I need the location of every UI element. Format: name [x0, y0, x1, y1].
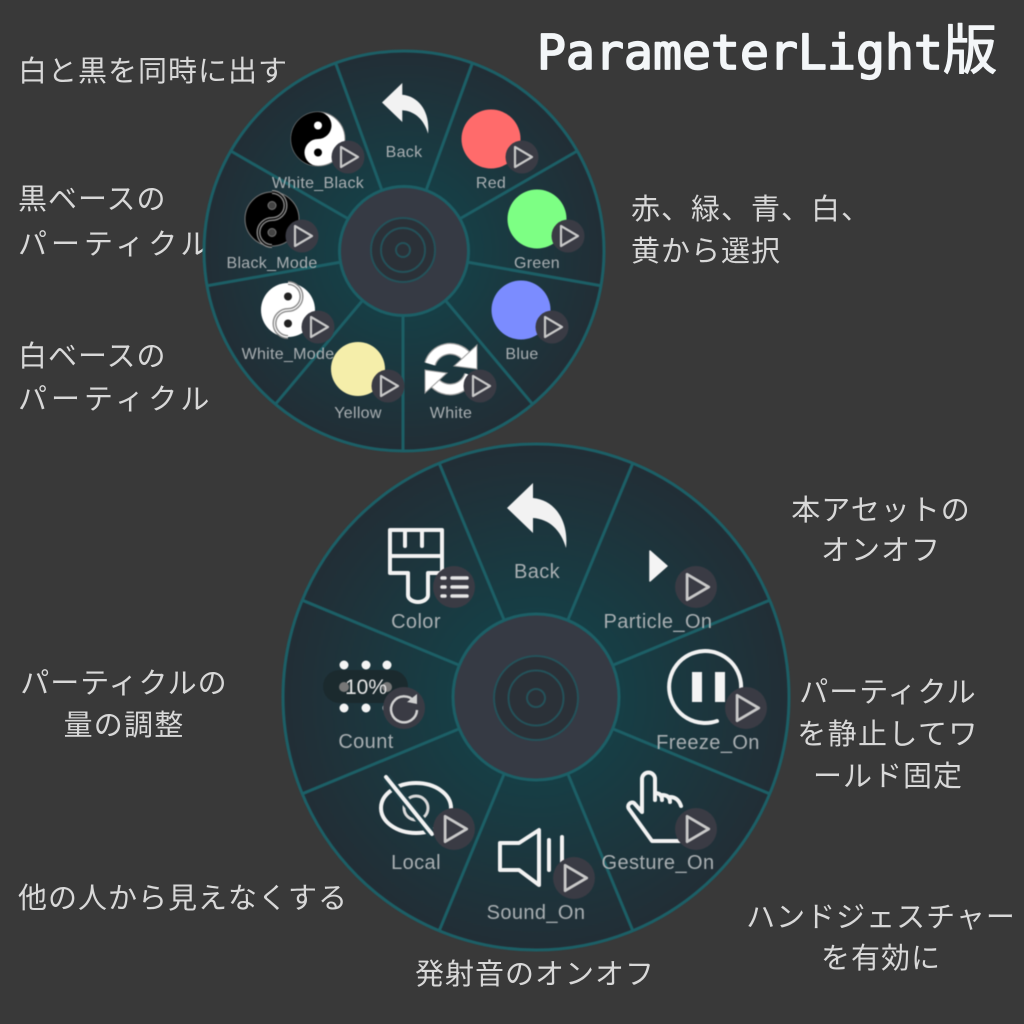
item: freeze on — [656, 651, 767, 754]
note: gesture: ハンドジェスチャー — [746, 902, 1016, 934]
item: particle on — [604, 551, 717, 633]
panel: bottom radial menu — [283, 444, 789, 950]
item: red — [462, 110, 538, 192]
note: freeze: パーティクル — [799, 677, 977, 709]
note: white base: 白ベースの — [18, 341, 167, 373]
item: white and black — [272, 112, 365, 192]
wheel disc — [283, 444, 789, 950]
item: back — [507, 483, 566, 583]
centre hub — [340, 186, 468, 316]
item: gesture on: Gesture_On — [602, 852, 714, 874]
item: back: Back — [514, 561, 561, 583]
note: sound: 発射音のオンオフ — [415, 958, 655, 991]
item: sound on — [487, 830, 595, 924]
note: colour selection: 赤、緑、青、白、 — [631, 194, 871, 226]
note: particle amount: 量の調整 — [64, 709, 184, 742]
item: count: 10% — [345, 676, 387, 699]
item: back: Back — [386, 144, 423, 161]
centre hub — [453, 614, 619, 780]
item: freeze on: Freeze_On — [656, 732, 760, 754]
item: count — [323, 660, 425, 753]
note: gesture: を有効に — [821, 942, 941, 975]
item: red: Red — [476, 175, 506, 192]
note: asset on off: 本アセットの — [791, 495, 971, 527]
panel: top radial menu — [204, 51, 604, 451]
item: particle on: Particle_On — [604, 611, 712, 633]
item: white: White — [430, 405, 472, 422]
note: colour selection: 黄から選択 — [631, 235, 781, 268]
item: yellow — [331, 342, 404, 422]
item: white mode — [242, 283, 334, 363]
item: white — [425, 345, 496, 422]
item: local — [381, 777, 475, 874]
note: white and black: 白と黒を同時に出す — [18, 55, 288, 88]
note: black base: 黒ベースの — [18, 184, 167, 216]
title: ParameterLight版 — [537, 21, 997, 81]
item: color — [390, 530, 475, 633]
item: black mode — [226, 192, 318, 272]
note: freeze: ールド固定 — [813, 760, 963, 793]
wheel disc — [204, 51, 604, 451]
item: local: Local — [391, 852, 441, 874]
note: white base: パーティクル — [18, 384, 213, 416]
item: green: Green — [514, 255, 560, 272]
item: black mode: Black_Mode — [226, 255, 318, 272]
item: white and black: White_Black — [272, 175, 365, 192]
note: local: 他の人から見えなくする — [18, 882, 348, 915]
note: particle amount: パーティクルの — [20, 668, 228, 700]
item: count: Count — [338, 731, 394, 753]
note: black base: パーティクル — [18, 229, 213, 261]
item: green — [508, 190, 584, 272]
item: sound on: Sound_On — [487, 902, 585, 924]
note: freeze: を静止してワ — [797, 718, 979, 751]
item: yellow: Yellow — [334, 405, 382, 422]
item: gesture on — [602, 773, 717, 874]
item: white mode: White_Mode — [242, 346, 334, 363]
item: color: Color — [391, 611, 441, 633]
item: blue — [492, 280, 568, 363]
note: asset on off: オンオフ — [821, 535, 941, 567]
item: blue: Blue — [505, 346, 539, 363]
item: back — [382, 83, 428, 161]
